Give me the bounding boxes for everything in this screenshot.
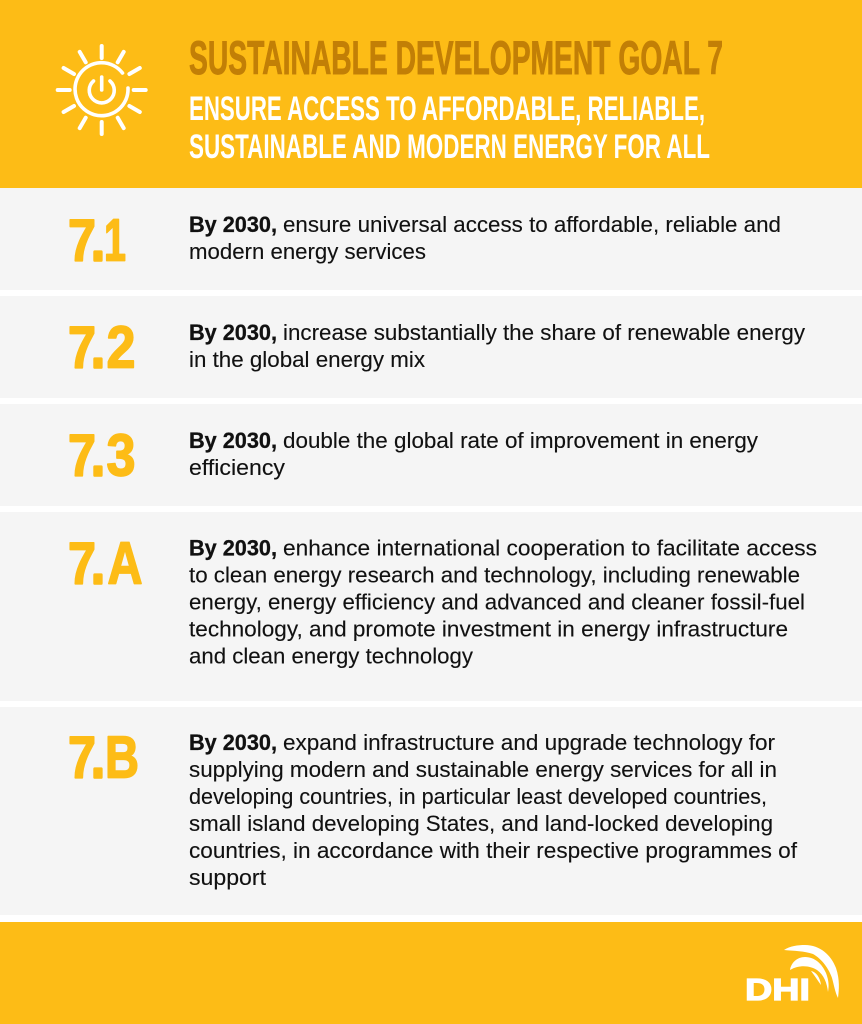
target text 7.1: ensure universal access to affordable, reliable and [283,212,781,237]
target number 7.1: 7 [68,208,96,274]
target text 7.B: expand infrastructure and upgrade technology for [283,730,775,755]
target number 7.2: 7 [68,314,96,380]
target text 7.B: support [189,865,266,890]
target number 7.1 [68,208,126,274]
target text 7.A [189,536,817,668]
footer band [0,922,862,1024]
target text 7.B: developing countries, in particular least developed countries, [189,784,767,809]
target number 7.3 [68,422,136,488]
target text 7.2: in the global energy mix [189,347,425,372]
target text 7.2: By 2030, [189,320,277,345]
target text 7.A: technology, and promote investment in energy infrastructure [189,616,788,642]
target text 7.1: By 2030, [189,212,277,237]
target number 7.3: . [91,422,105,488]
panel: target 7.2 [0,296,862,398]
icon: sun with power symbol [58,46,146,134]
header band [0,0,862,188]
target number 7.2: 2 [106,314,136,380]
target text 7.3: efficiency [189,455,285,480]
target text 7.3 [189,428,758,480]
target number 7.2: . [91,314,105,380]
target text 7.2: increase substantially the share of renewable energy [283,320,805,345]
panel: target 7.A [0,512,862,701]
target text 7.B: supplying modern and sustainable energy services for all in [189,757,777,782]
target text 7.3: By 2030, [189,428,277,453]
target number 7.2 [68,314,136,380]
target text 7.1 [189,212,781,264]
target text 7.B: countries, in accordance with their respective programmes of [189,838,798,863]
target number 7.3: 7 [68,422,96,488]
target text 7.B [189,730,798,890]
panel: target 7.3 [0,404,862,506]
target text 7.A: to clean energy research and technology, including renewable [189,562,800,588]
target text 7.3: double the global rate of improvement in energy [283,428,758,453]
target text 7.B: By 2030, [189,730,277,755]
target text 7.A: By 2030, [189,536,277,560]
target number 7.B [68,724,139,790]
logo: DHI: DHI [745,972,810,1007]
target text 7.2 [189,320,805,372]
subtitle [189,90,710,166]
target number 7.B: B [105,724,139,790]
target number 7.A: 7 [68,530,96,596]
target number 7.3: 3 [106,422,136,488]
logo: DHI [745,945,839,1007]
target number 7.1: . [91,208,105,274]
target number 7.B: . [91,724,105,790]
target text 7.A: and clean energy technology [189,644,473,668]
panel: target 7.1 [0,188,862,290]
target number 7.A: A [108,530,142,596]
target number 7.1: 1 [104,208,126,274]
target text 7.A: enhance international cooperation to facilitate access [283,536,817,560]
target number 7.A: . [91,530,105,596]
panel: target 7.B [0,707,862,915]
target text 7.A: energy, energy efficiency and advanced and cleaner fossil-fuel [189,590,805,614]
target number 7.B: 7 [68,724,96,790]
target text 7.B: small island developing States, and land-locked developing [189,811,773,836]
target text 7.1: modern energy services [189,239,426,264]
target number 7.A [68,530,142,596]
